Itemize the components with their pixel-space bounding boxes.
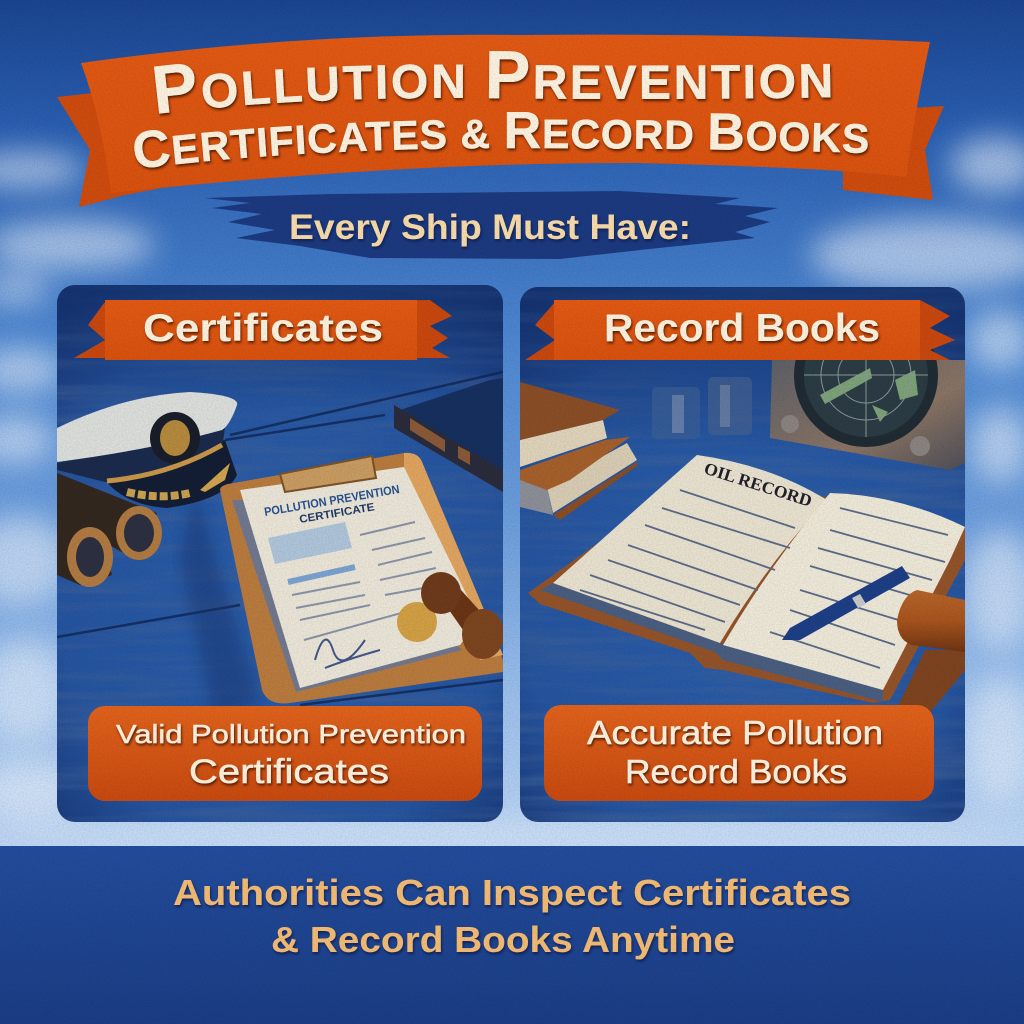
panel heading ribbon xyxy=(525,300,955,360)
stamp xyxy=(421,572,504,659)
caption button: Accurate Pollution xyxy=(587,714,883,751)
certificate sheet: CERTIFICATE xyxy=(298,501,375,526)
icon: binoculars xyxy=(57,473,162,587)
certificate sheet: POLLUTION PREVENTION xyxy=(263,482,401,519)
caption button: Certificates xyxy=(189,753,389,791)
panel heading ribbon: Certificates xyxy=(143,307,383,350)
panel: certificates xyxy=(57,285,504,822)
wooden table planks xyxy=(57,372,503,705)
banner right tail xyxy=(843,106,944,200)
bottom band xyxy=(0,846,1024,1024)
icon: book on table xyxy=(394,378,503,492)
icon: captain's hat xyxy=(57,392,237,508)
title banner xyxy=(57,34,944,207)
icon: open oil record book xyxy=(528,455,965,703)
subtitle: Every Ship Must Have: xyxy=(289,208,691,247)
panel: record books xyxy=(520,287,965,822)
certificate sheet xyxy=(232,467,479,692)
icon: open oil record book: OIL RECORD xyxy=(702,459,814,511)
icon: clipboard xyxy=(220,453,504,703)
title text: POLLUTION PREVENTION xyxy=(154,51,834,118)
brush stroke behind subtitle xyxy=(205,191,778,259)
footer text: & Record Books Anytime xyxy=(271,919,735,960)
footer text: Authorities Can Inspect Certificates xyxy=(173,872,851,913)
shadow under objects xyxy=(180,490,260,725)
icon: radar instrument xyxy=(770,348,965,470)
title text: CERTIFICATES & RECORD BOOKS xyxy=(134,112,870,172)
caption button xyxy=(544,705,934,801)
icon: glass jars xyxy=(652,377,752,439)
caption button: Record Books xyxy=(625,753,847,790)
clip xyxy=(280,456,376,492)
icon: gavel xyxy=(897,590,965,712)
caption button xyxy=(88,706,482,801)
footer text xyxy=(173,872,851,960)
fountain pen xyxy=(782,566,910,640)
panel heading ribbon xyxy=(74,300,452,360)
banner main ribbon xyxy=(81,35,930,193)
panel heading ribbon: Record Books xyxy=(604,307,880,350)
icon: stacked books xyxy=(520,382,637,520)
caption button: Valid Pollution Prevention xyxy=(116,719,466,749)
title text xyxy=(134,51,870,172)
banner left tail xyxy=(57,90,166,207)
